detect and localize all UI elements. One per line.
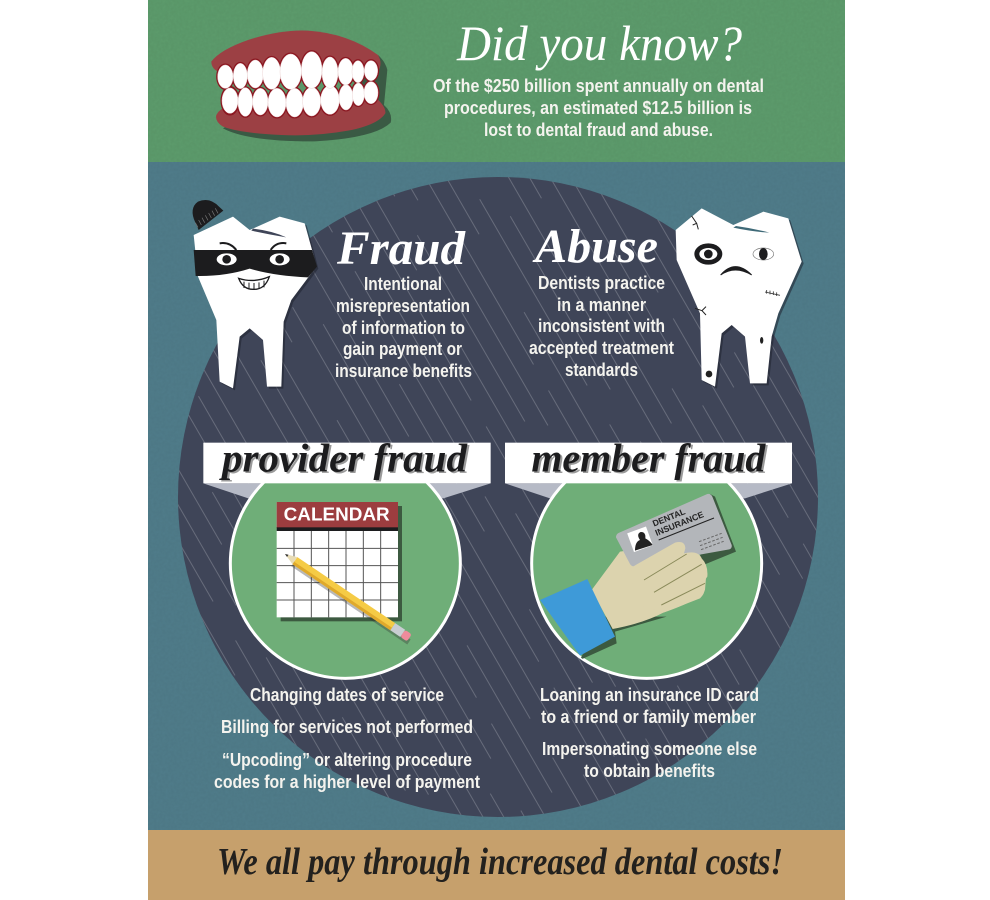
text block: provider fraud examples: Billing for services not performed [221,717,473,737]
text block: provider fraud examples [214,685,480,792]
text block: fraud definition: gain payment or [343,339,462,359]
text block: fraud statistic: Of the $250 billion spent annually on dental [433,76,764,96]
icon: dentures [211,31,391,141]
panel: dark striped circle [178,177,818,817]
icon: pencil [281,550,413,645]
panel: did you know header [148,0,845,162]
text block: abuse definition: Dentists practice [538,273,665,293]
text block: abuse definition: in a manner [557,295,646,315]
heading: provider fraud: provider fraud [219,435,468,480]
text block: fraud statistic [433,76,764,140]
icon: hand holding insurance card [540,494,736,660]
icon: injured tooth [676,208,804,389]
text block: member fraud examples: Impersonating someone else [542,739,757,759]
heading: member fraud: member fraud [533,437,768,482]
text block: fraud definition [335,274,472,381]
heading: did you know: Did you know? [456,15,742,71]
text block: member fraud examples [540,685,759,781]
heading: abuse: Abuse [532,220,658,273]
heading: provider fraud: provider fraud [221,437,470,482]
icon: calendar: CALENDAR [284,504,390,525]
icon: calendar [277,502,402,621]
banner: provider fraud [203,443,491,483]
text block: fraud definition: Intentional [364,274,442,294]
text block: provider fraud examples: “Upcoding” or altering procedure [222,750,472,770]
text block: abuse definition: inconsistent with [538,316,665,336]
panel: bottom banner [148,830,845,900]
text: closing message: We all pay through increased dental costs! [217,841,783,883]
text block: fraud statistic: procedures, an estimated $12.5 billion is [444,98,752,118]
text block: member fraud examples: to obtain benefits [584,761,715,781]
heading: fraud: Fraud [336,222,466,275]
text block: provider fraud examples: Changing dates of service [250,685,444,705]
icon: robber tooth [193,200,318,390]
icon: hand holding insurance card: DENTAL [651,506,687,529]
panel: member fraud [505,435,792,678]
text block: fraud definition: of information to [342,318,465,338]
panel: provider fraud [203,435,491,678]
text block: provider fraud examples: codes for a higher level of payment [214,772,480,792]
text block: abuse definition: accepted treatment [529,338,674,358]
text block: fraud definition: insurance benefits [335,361,472,381]
text block: fraud definition: misrepresentation [336,296,470,316]
text block: fraud statistic: lost to dental fraud and abuse. [484,120,713,140]
text block: member fraud examples: Loaning an insurance ID card [540,685,759,705]
heading: member fraud: member fraud [531,435,766,480]
text block: abuse definition: standards [565,360,638,380]
panel: main teal background [148,162,845,830]
text block: abuse definition [529,273,674,380]
icon: hand holding insurance card: INSURANCE [654,509,705,538]
text block: member fraud examples: to a friend or family member [541,707,756,727]
banner: member fraud [505,443,792,483]
